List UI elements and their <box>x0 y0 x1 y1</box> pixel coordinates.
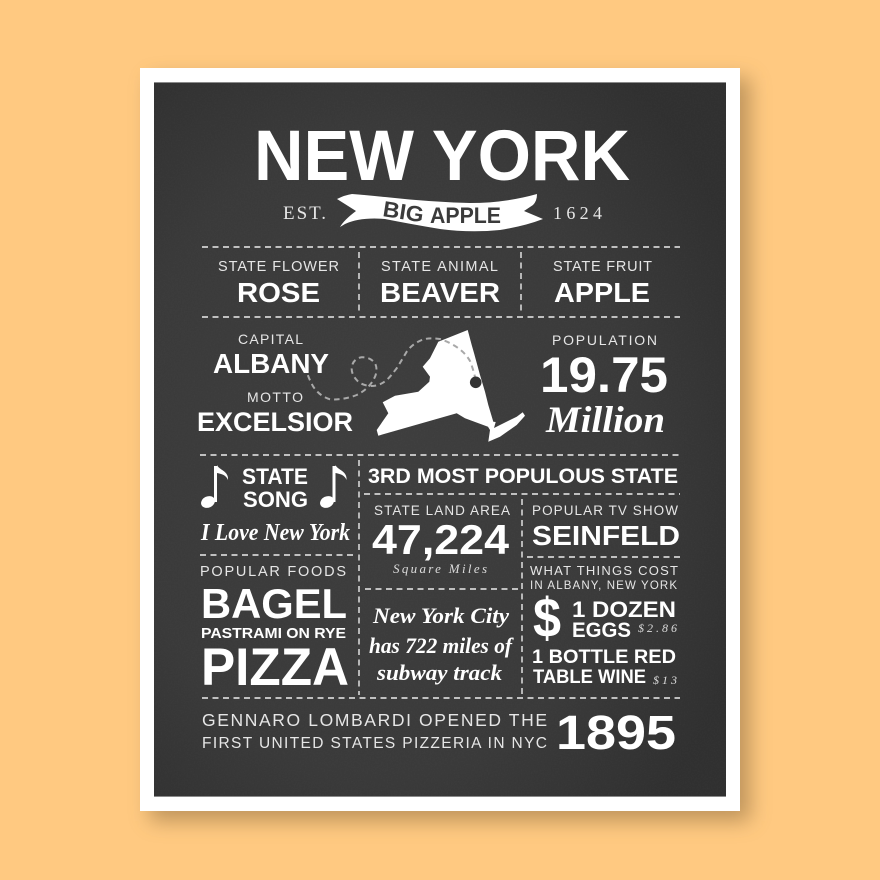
est label: EST. <box>283 203 326 224</box>
pizzeria fact: GENNARO LOMBARDI OPENED THE <box>202 710 547 730</box>
dashed dividers <box>200 247 680 698</box>
popular foods: PASTRAMI ON RYE <box>201 625 346 642</box>
motto: EXCELSIOR <box>197 407 353 437</box>
what things cost: 1 BOTTLE RED <box>532 647 676 668</box>
poster shadow <box>150 78 750 821</box>
subway fact: has 722 miles of <box>369 633 515 658</box>
banner: big apple: APPLE <box>430 203 501 228</box>
popular foods: PIZZA <box>201 638 349 697</box>
popular tv show: POPULAR TV SHOW <box>532 503 678 518</box>
subway fact <box>369 603 515 685</box>
what things cost: EGGS <box>572 619 631 642</box>
popular tv show <box>532 503 680 551</box>
map of new york state <box>307 330 525 442</box>
state animal: BEAVER <box>380 277 500 308</box>
title: NEW YORK <box>254 117 630 196</box>
population: Million <box>545 400 665 441</box>
what things cost: $2.86 <box>638 621 677 635</box>
popular foods: POPULAR FOODS <box>200 564 346 580</box>
banner: big apple: BIG <box>381 196 426 227</box>
icon: music note right <box>318 465 347 510</box>
pizzeria fact: 1895 <box>556 707 676 760</box>
what things cost <box>530 563 678 688</box>
icon: dollar sign: $ <box>533 586 561 649</box>
dashed route <box>307 338 476 399</box>
state fruit: APPLE <box>554 277 650 308</box>
what things cost: $13 <box>653 673 677 687</box>
population <box>540 332 668 441</box>
state fruit <box>553 259 652 308</box>
popular foods <box>200 564 349 697</box>
motto <box>197 389 353 437</box>
capital: ALBANY <box>213 348 329 379</box>
pizzeria fact <box>202 707 676 760</box>
state animal: STATE ANIMAL <box>381 259 498 275</box>
popular foods: BAGEL <box>201 580 347 627</box>
chalkboard panel <box>154 82 726 797</box>
motto: MOTTO <box>247 389 303 405</box>
what things cost: TABLE WINE <box>533 667 646 688</box>
state land area: Square Miles <box>393 561 487 576</box>
subway fact: New York City <box>372 603 509 628</box>
state animal <box>380 259 500 308</box>
state flower: STATE FLOWER <box>218 259 339 275</box>
state flower: ROSE <box>237 277 320 308</box>
pizzeria fact: FIRST UNITED STATES PIZZERIA IN NYC <box>202 735 547 752</box>
what things cost: WHAT THINGS COST <box>530 563 678 578</box>
state fruit: STATE FRUIT <box>553 259 652 275</box>
what things cost: 1 DOZEN <box>572 597 676 622</box>
population: POPULATION <box>552 332 657 348</box>
icon: music note left <box>199 465 228 510</box>
capital <box>213 331 329 379</box>
most populous heading: 3RD MOST POPULOUS STATE <box>368 465 678 488</box>
popular tv show: SEINFELD <box>532 520 680 551</box>
state land area: STATE LAND AREA <box>374 503 510 518</box>
capital: CAPITAL <box>238 331 303 347</box>
state land area <box>372 503 510 576</box>
banner: big apple <box>337 194 543 231</box>
state song: I Love New York <box>200 520 350 546</box>
what things cost: IN ALBANY, NEW YORK <box>530 580 677 592</box>
state song <box>199 464 350 546</box>
white poster frame <box>140 68 740 811</box>
state song: SONG <box>243 487 308 512</box>
albany marker <box>470 376 482 388</box>
state land area: 47,224 <box>372 516 510 563</box>
est year: 1624 <box>553 203 602 223</box>
state flower <box>218 259 339 308</box>
subway fact: subway track <box>376 660 502 685</box>
population: 19.75 <box>540 347 668 403</box>
state song: STATE <box>242 464 308 489</box>
